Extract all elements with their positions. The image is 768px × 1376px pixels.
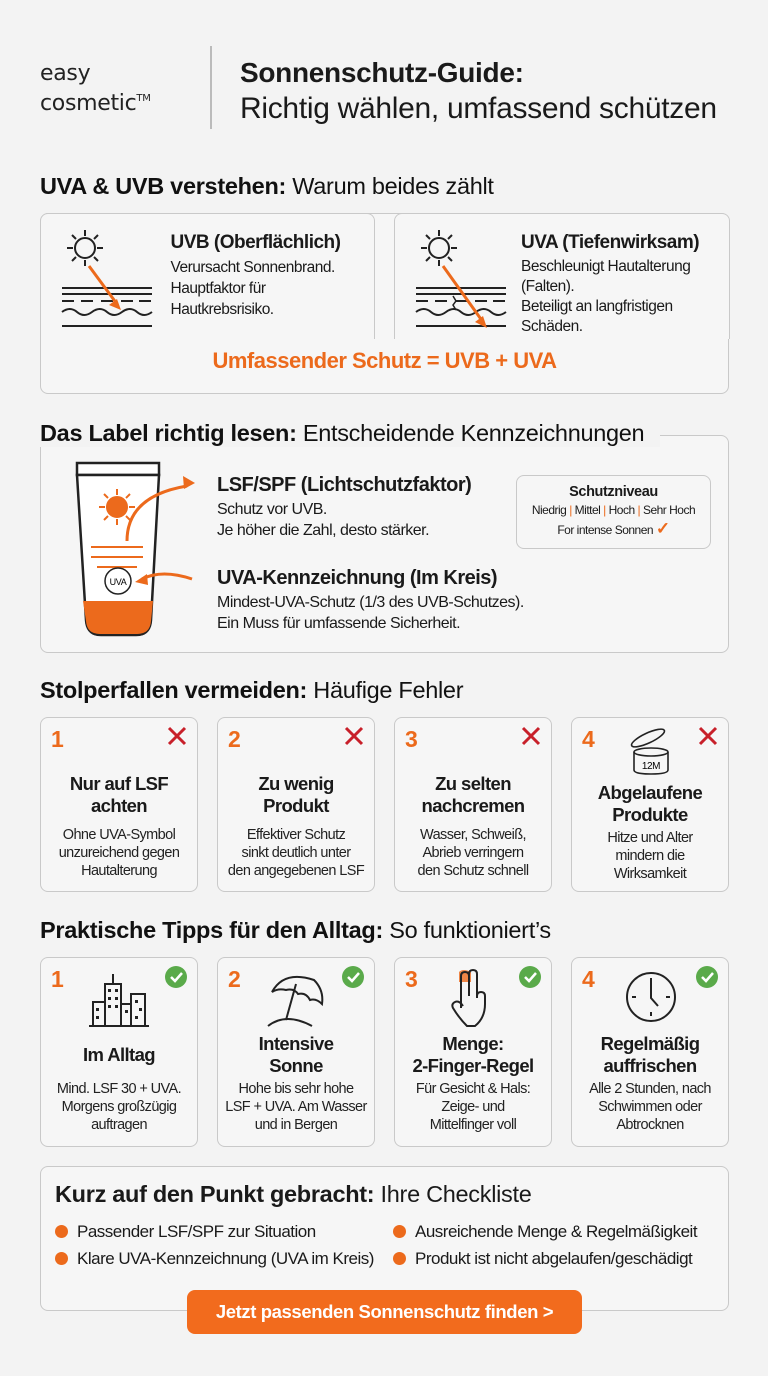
icon: clock <box>626 972 676 1022</box>
text: LSF: Je höher die Zahl, desto stärker. <box>217 522 429 539</box>
text: UVB: UVB (Oberflächlich) <box>170 232 340 252</box>
card: tip 2 <box>217 957 375 1147</box>
card: tip 3: Mittelfinger voll <box>430 1117 516 1133</box>
text: UVA <box>521 232 699 334</box>
card: mistake 2: 2 <box>228 726 240 752</box>
text: UVA: Beteiligt an langfristigen <box>521 298 673 314</box>
text: LSF: Schutz vor UVB. <box>217 501 327 518</box>
card: mistake 2: Zu wenig <box>258 773 334 794</box>
text: LSF: LSF/SPF (Lichtschutzfaktor) <box>217 474 471 496</box>
card: tip 4: 4 <box>582 966 594 992</box>
card: mistake 1 <box>40 717 198 892</box>
icon: jar 12M: 12M <box>642 761 660 772</box>
text: UVA mark: Ein Muss für umfassende Sicherheit. <box>217 615 460 632</box>
icon: umbrella <box>267 976 324 1027</box>
card: tip 1 <box>40 957 198 1147</box>
card: mistake 2: Produkt <box>263 795 329 816</box>
card: tip 3: Zeige- und <box>441 1099 505 1115</box>
text: UVB <box>170 232 340 318</box>
card: tip 2: Intensive <box>259 1033 333 1054</box>
title: Richtig wählen, umfassend schützen <box>240 92 717 125</box>
card: mistake 4: mindern die <box>615 848 685 864</box>
icon: sun skin UVA <box>416 230 506 328</box>
card: mistake 4: Hitze und Alter <box>607 830 693 846</box>
card: mistake 1: Ohne UVA-Symbol <box>63 827 175 843</box>
card: tip 4: auffrischen <box>603 1055 697 1076</box>
card: tip 2: 2 <box>228 966 240 992</box>
card: tip 1: 1 <box>51 966 63 992</box>
card: mistake 1: Hautalterung <box>81 863 157 879</box>
card: mistake 4 <box>571 717 729 892</box>
panel: label <box>40 435 729 653</box>
logo: cosmeticTM <box>40 91 151 116</box>
card: tip 4: Abtrocknen <box>616 1117 684 1133</box>
card: mistake 3: Wasser, Schweiß, <box>420 827 526 843</box>
card: mistake 3: 3 <box>405 726 417 752</box>
card: tip 2: und in Bergen <box>255 1117 337 1133</box>
callout: Schutzniveau: Niedrig | Mittel | Hoch | Sehr Hoch <box>532 503 695 517</box>
card: tip 1: auftragen <box>91 1117 147 1133</box>
card: mistake 3: nachcremen <box>422 795 524 816</box>
card: tip 2: Hohe bis sehr hohe <box>239 1081 353 1097</box>
list: checklist items: Passender LSF/SPF zur Situation <box>77 1222 316 1241</box>
sub-panel: UVA <box>394 212 730 338</box>
card: mistake 3: den Schutz schnell <box>418 863 528 879</box>
card: mistake 2: Effektiver Schutz <box>247 827 345 843</box>
card: mistake 4: 4 <box>582 726 594 752</box>
heading: checklist: Kurz auf den Punkt gebracht: Ihre Checkliste <box>55 1181 531 1207</box>
list: checklist items: Klare UVA-Kennzeichnung (UVA im Kreis) <box>77 1249 374 1268</box>
card: mistake 3: Abrieb verringern <box>422 845 524 861</box>
icon: sun skin UVB <box>62 230 152 327</box>
card: tip 2: Sonne <box>269 1055 323 1076</box>
heading: UVA & UVB: UVA & UVB verstehen: Warum beides zählt <box>40 173 494 199</box>
callout: Schutzniveau: For intense Sonnen ✓ <box>557 519 670 538</box>
logo: easy <box>40 61 90 86</box>
icon: two fingers <box>451 969 486 1027</box>
card: mistake 1: achten <box>91 795 147 816</box>
card: mistake 4: Abgelaufene <box>598 782 702 803</box>
text: UVA mark: UVA-Kennzeichnung (Im Kreis) <box>217 567 497 589</box>
card: tip 1: Im Alltag <box>83 1044 155 1065</box>
card: mistake 1: 1 <box>51 726 63 752</box>
card: tip 1: Morgens großzügig <box>62 1099 176 1115</box>
icon: sunscreen tube <box>76 462 195 636</box>
card: tip 4 <box>571 957 729 1147</box>
callout: Schutzniveau <box>516 475 711 549</box>
icon: jar 12M <box>630 728 669 775</box>
text: UVB: Hauptfaktor für <box>170 280 266 296</box>
sub-panel: UVB <box>40 212 374 338</box>
heading: mistakes: Stolperfallen vermeiden: Häufige Fehler <box>40 677 463 703</box>
card: mistake 1: Nur auf LSF <box>70 773 168 794</box>
card: mistake 2 <box>217 717 375 892</box>
card: mistake 3 <box>394 717 552 892</box>
text: UVA mark <box>217 567 524 632</box>
panel: checklist <box>40 1166 729 1311</box>
text: UVA: UVA (Tiefenwirksam) <box>521 232 699 252</box>
card: mistake 3: Zu selten <box>435 773 511 794</box>
heading: label: Das Label richtig lesen: Entscheidende Kennzeichnungen <box>40 420 644 446</box>
card: tip 4: Schwimmen oder <box>598 1099 702 1115</box>
text: UVB: Hautkrebsrisiko. <box>170 300 274 318</box>
list: checklist items <box>55 1222 698 1268</box>
card: mistake 2: sinkt deutlich unter <box>242 845 350 861</box>
text: UVA: (Falten). <box>521 278 574 294</box>
callout: formula: Umfassender Schutz = UVB + UVA <box>212 348 557 373</box>
text: UVB: Verursacht Sonnenbrand. <box>170 258 335 276</box>
callout: Schutzniveau: Schutzniveau <box>569 484 658 500</box>
card: mistake 4: Produkte <box>612 804 688 825</box>
logo <box>40 61 151 116</box>
card: mistake 4: Wirksamkeit <box>614 866 686 882</box>
card: tip 3: 3 <box>405 966 417 992</box>
text: UVA mark: Mindest-UVA-Schutz (1/3 des UVB-Schutzes). <box>217 594 524 611</box>
heading: tips: Praktische Tipps für den Alltag: So funktioniert’s <box>40 917 551 943</box>
card: tip 4: Alle 2 Stunden, nach <box>589 1081 711 1097</box>
text: UVA: Schäden. <box>521 318 582 334</box>
card: tip 4: Regelmäßig <box>601 1033 699 1054</box>
card: tip 1: Mind. LSF 30 + UVA. <box>57 1081 181 1097</box>
card: mistake 2: den angegebenen LSF <box>228 863 364 879</box>
card: tip 3: Für Gesicht & Hals: <box>416 1081 530 1097</box>
text: LSF <box>217 474 471 539</box>
button: CTA <box>187 1290 582 1334</box>
card: tip 3 <box>394 957 552 1147</box>
text: UVA: Beschleunigt Hautalterung <box>521 258 690 274</box>
list: checklist items: Produkt ist nicht abgelaufen/geschädigt <box>415 1249 692 1268</box>
icon: city <box>89 974 149 1027</box>
card: tip 2: LSF + UVA. Am Wasser <box>225 1099 367 1115</box>
icon: sunscreen tube: UVA <box>110 577 127 587</box>
button: CTA: Jetzt passenden Sonnenschutz finden > <box>216 1301 553 1322</box>
card: tip 3: 2-Finger-Regel <box>412 1055 534 1076</box>
card: tip 3: Menge: <box>442 1033 504 1054</box>
panel: UVA UVB <box>40 213 729 394</box>
card: mistake 1: unzureichend gegen <box>59 845 179 861</box>
title <box>240 57 717 125</box>
list: checklist items: Ausreichende Menge & Regelmäßigkeit <box>415 1222 697 1241</box>
title: Sonnenschutz-Guide: <box>240 57 524 88</box>
